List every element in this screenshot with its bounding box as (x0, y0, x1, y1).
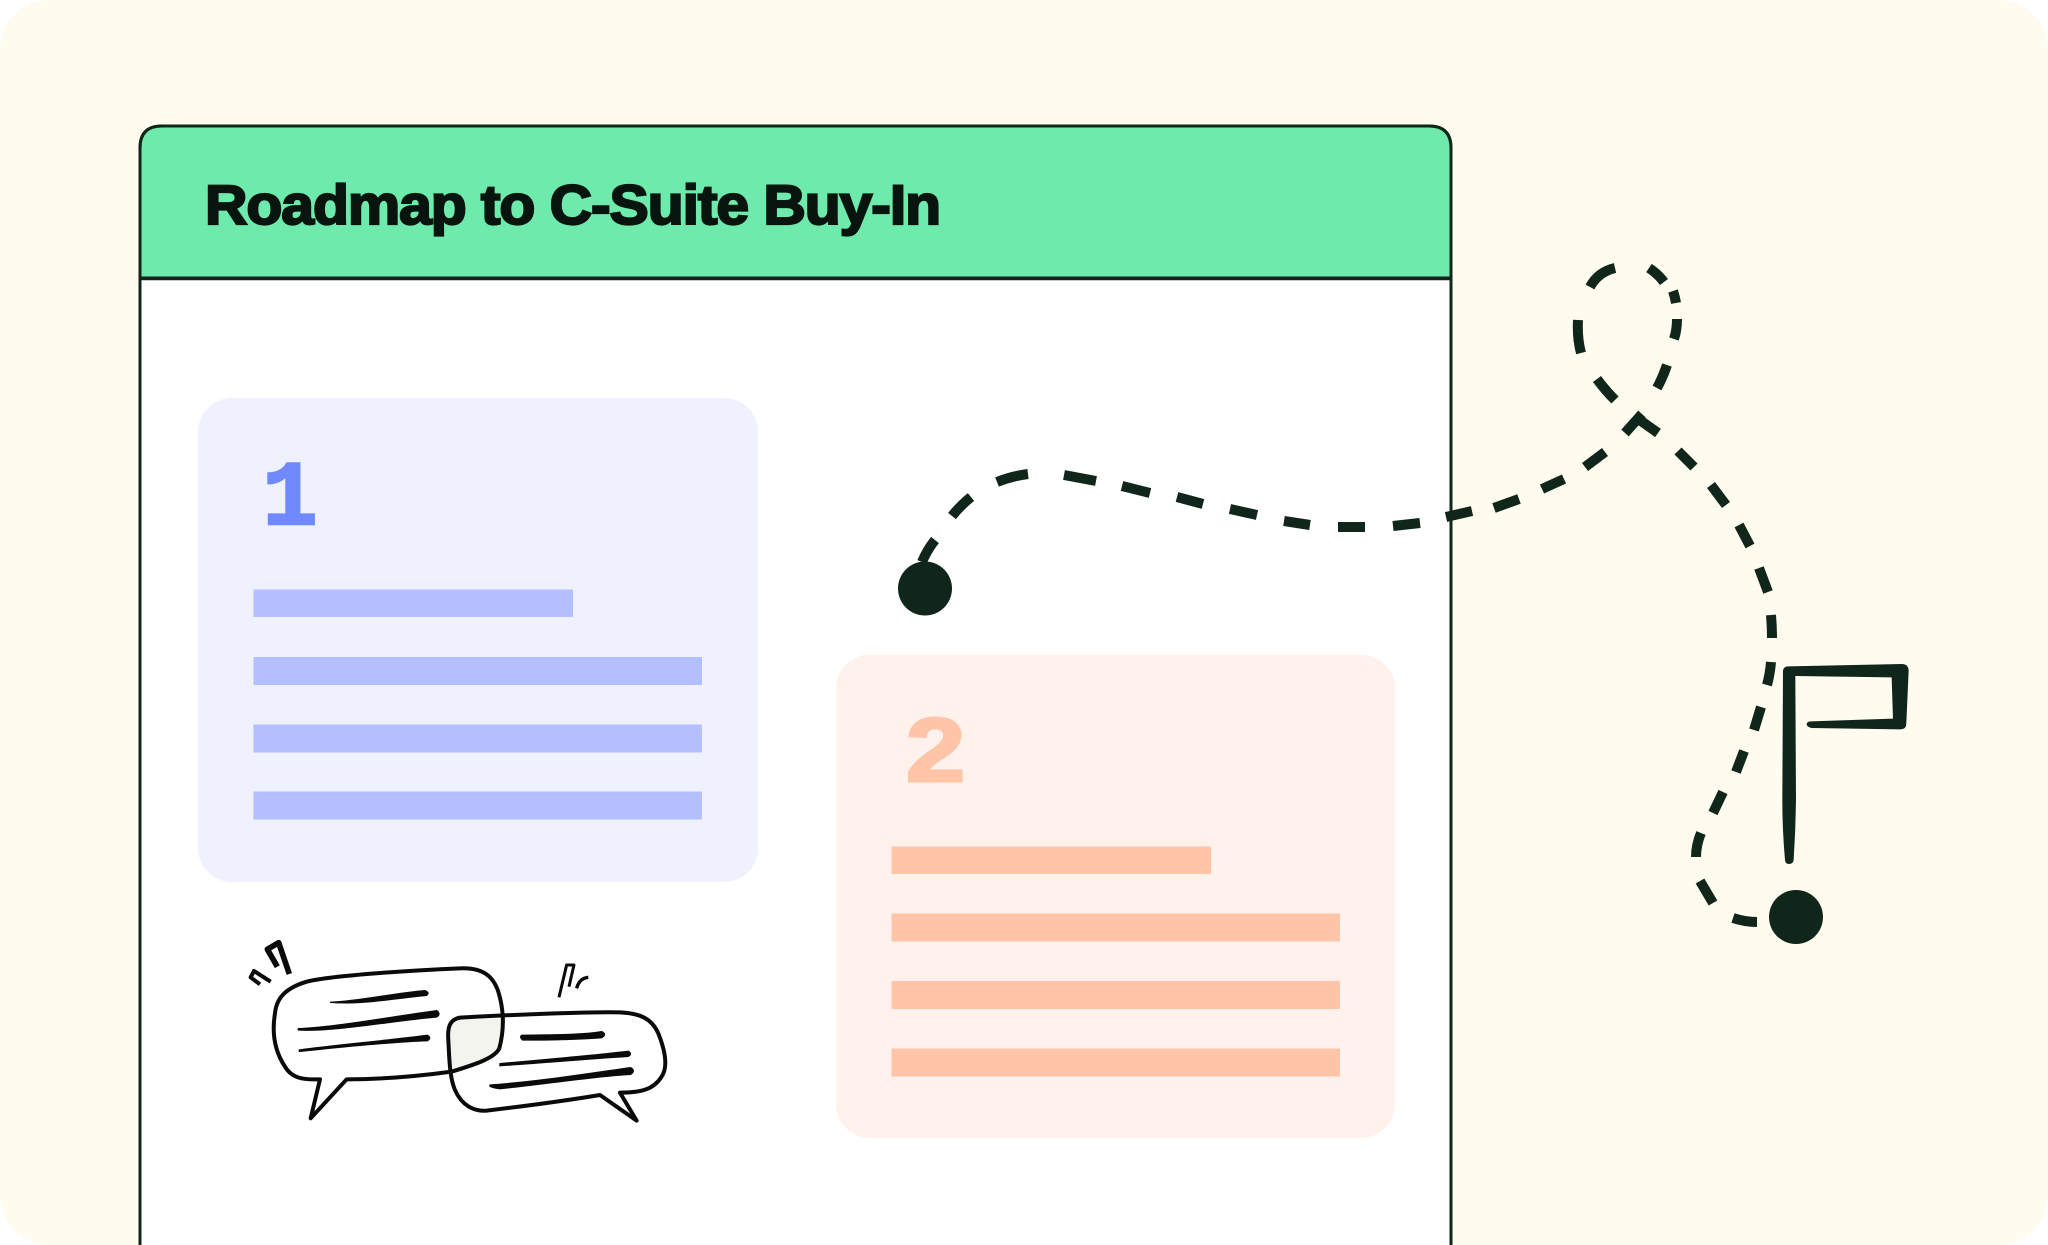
arrow: dashed roadmap route (922, 268, 1772, 922)
step number 1: 1 (262, 447, 318, 552)
step 1 text placeholder bars (254, 590, 702, 820)
icon: end dot (1769, 890, 1823, 944)
left bubble (274, 968, 503, 1118)
icon: start dot (898, 562, 952, 616)
icon: flag (1782, 664, 1909, 864)
right bubble (448, 1012, 665, 1121)
panel: roadmap window (139, 126, 1452, 1245)
icon: speech bubbles (251, 943, 665, 1121)
overlap shading (448, 1018, 504, 1069)
bubble text strokes (298, 991, 633, 1089)
header bar (140, 126, 1451, 278)
panel: step 1 card (198, 398, 758, 882)
window body (140, 126, 1451, 1245)
panel: step 2 card (836, 654, 1395, 1138)
title: Roadmap to C-Suite Buy-In (205, 173, 940, 236)
step 2 text placeholder bars (892, 846, 1340, 1076)
exclamation marks (251, 943, 588, 997)
step number 2: 2 (906, 700, 965, 800)
